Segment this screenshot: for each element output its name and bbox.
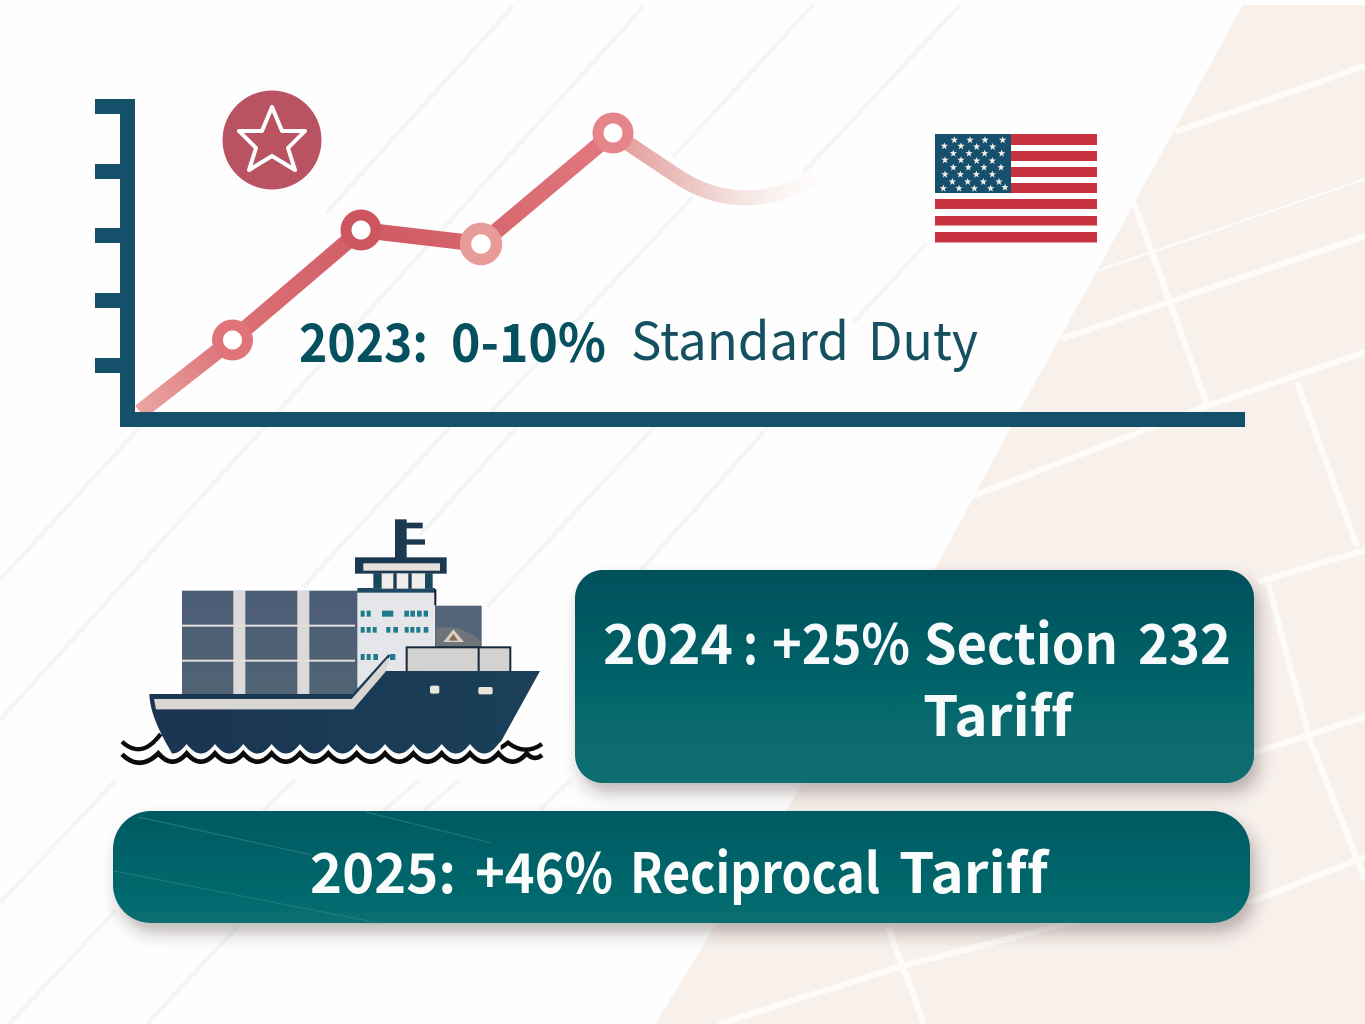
panel: 2025 reciprocal tariff [113,811,1250,923]
text: 2024 tariff label: : [743,600,758,680]
text: 2025 tariff label: Reciprocal [630,829,880,909]
text: 2025 tariff label: +46% [475,829,613,909]
deck stripe [154,658,389,709]
text: 2024 tariff label [603,600,1231,752]
waves [122,734,542,767]
line chart [95,99,1245,427]
data point 3 [466,228,496,260]
text: 2025 tariff label: 2025: [310,829,456,909]
chart line [140,133,613,412]
icon: star badge [222,90,322,190]
bridge and mast [355,519,447,589]
hull [149,654,540,758]
superstructure [357,588,436,687]
text: 2023 standard duty: 2023: [299,302,428,378]
text: 2024 tariff label: Tariff [923,672,1075,752]
data point 4 [598,118,628,148]
text: 2025 tariff label [310,829,1051,909]
text: 2025 tariff label: Tariff [899,829,1051,909]
data point 1 [218,325,248,355]
panel: 2024 section 232 tariff [575,570,1254,783]
chart line fading segment [620,138,815,198]
text: 2024 tariff label: 2024 [603,600,733,680]
text: 2023 standard duty: Standard [631,300,849,375]
deck boxes [407,647,510,672]
data point 2 [346,215,376,245]
axes [95,99,1245,427]
text: 2024 tariff label: 232 [1138,600,1231,680]
text: 2024 tariff label: +25% [772,600,910,680]
icon: container ship [122,519,542,767]
text: 2023 standard duty: 0-10% [451,302,606,378]
rear container [435,606,482,647]
text: 2023 standard duty: Duty [868,300,978,375]
text: 2024 tariff label: Section [924,600,1118,680]
portholes [430,686,493,694]
containers [182,591,358,695]
icon: US flag [935,134,1097,242]
text: 2023 standard duty [299,300,978,378]
